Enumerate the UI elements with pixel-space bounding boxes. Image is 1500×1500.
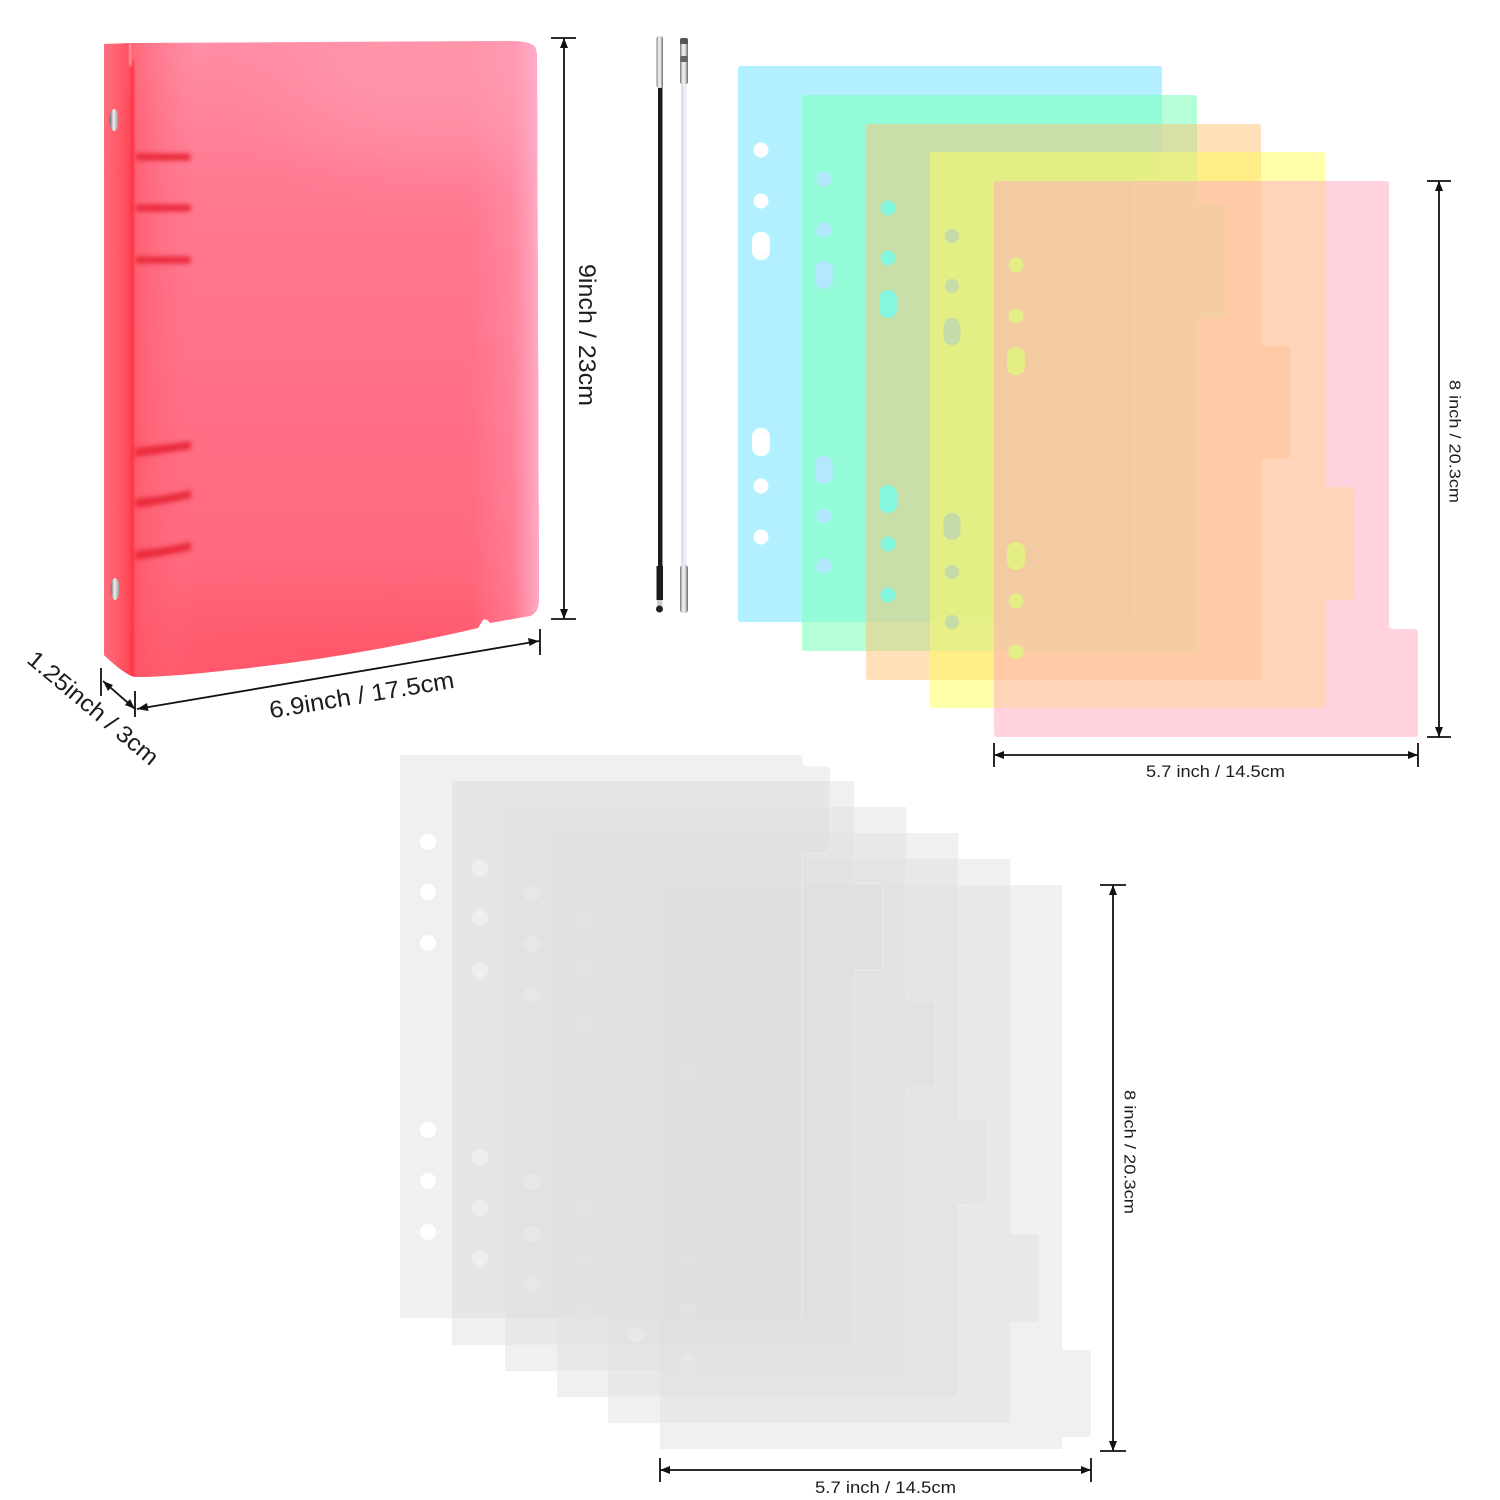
frosted holes: sheet 5 [628,937,644,1343]
dimension: binder width [135,629,540,724]
frosted holes: sheet 4 [576,913,592,1318]
dimension: coloured sheet height [1427,181,1462,737]
dimension: binder height: 9inch / 23cm [573,264,600,406]
frosted sheet 2 [452,781,883,1345]
frosted holes: sheet 2 [472,860,488,1266]
dimension: frosted sheet width [660,1458,1091,1497]
frosted sheet 4 [557,833,987,1397]
dimension: coloured sheet width [994,743,1418,781]
dimension: binder height [551,38,600,619]
dimension: coloured sheet height: 8 inch / 20.3cm [1446,380,1462,503]
frosted holes: sheet 3 [524,885,540,1292]
punched holes: orange sheet [879,200,897,602]
punched holes: blue sheet [752,142,770,544]
sheet: yellow [930,152,1354,708]
dimension: binder width: 6.9inch / 17.5cm [267,667,456,724]
dimension: coloured sheet width: 5.7 inch / 14.5cm [1146,763,1285,781]
frosted sheet 1 [400,755,830,1318]
dimension: frosted sheet height: 8 inch / 20.3cm [1120,1090,1138,1214]
punched holes: green sheet [815,172,833,574]
sheet: orange [866,124,1290,680]
binder rivets [110,109,120,600]
sheet: pink [994,181,1418,737]
sheet: green [802,95,1226,651]
frosted holes: sheet 6 [680,963,696,1370]
frosted holes: sheet 1 [420,834,436,1240]
punched holes: pink sheet [1007,258,1025,660]
dimension: frosted sheet height [1100,885,1138,1451]
frosted sheet edges [452,0,1345,1423]
black strap [656,36,663,612]
white strap [680,38,688,613]
frosted sheet 6 [660,885,1091,1449]
dimension: frosted sheet width: 5.7 inch / 14.5cm [815,1479,956,1497]
dimension: binder spine thickness: 1.25inch / 3cm [22,646,164,770]
frosted sheet 3 [505,807,936,1371]
binder [104,41,539,677]
binder ring slots [135,154,191,560]
binder shading [98,0,620,685]
binder cover [104,41,539,677]
coloured divider sheets [738,66,1418,737]
frosted divider sheets [400,755,1091,1449]
sheet: blue [738,66,1162,622]
elastic straps [656,36,688,613]
frosted sheet 5 [608,859,1039,1423]
punched holes: yellow sheet [944,229,960,629]
